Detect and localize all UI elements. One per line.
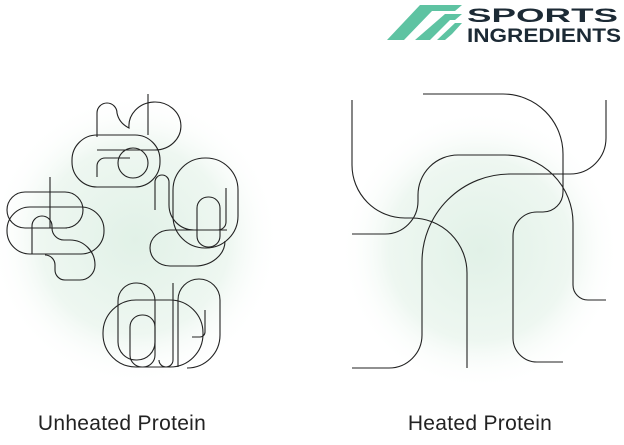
unheated protein strands xyxy=(7,94,238,368)
strand 3 xyxy=(423,94,563,362)
logo xyxy=(387,5,621,47)
logo text: SPORTS xyxy=(467,6,618,27)
strand 1 xyxy=(352,100,467,368)
label: heated: Heated Protein xyxy=(408,412,552,435)
cluster top xyxy=(72,94,181,187)
cluster bottom xyxy=(103,279,220,368)
strand 4 xyxy=(352,100,606,368)
heated protein strands xyxy=(352,94,606,368)
label: unheated: Unheated Protein xyxy=(38,412,206,435)
cluster right xyxy=(150,158,238,266)
glow: heated xyxy=(340,110,620,390)
strand 2 xyxy=(352,155,606,300)
logo mark xyxy=(387,5,462,40)
logo: INGREDIENTS xyxy=(467,26,621,47)
cluster left xyxy=(7,177,104,280)
glow: unheated xyxy=(0,95,280,385)
